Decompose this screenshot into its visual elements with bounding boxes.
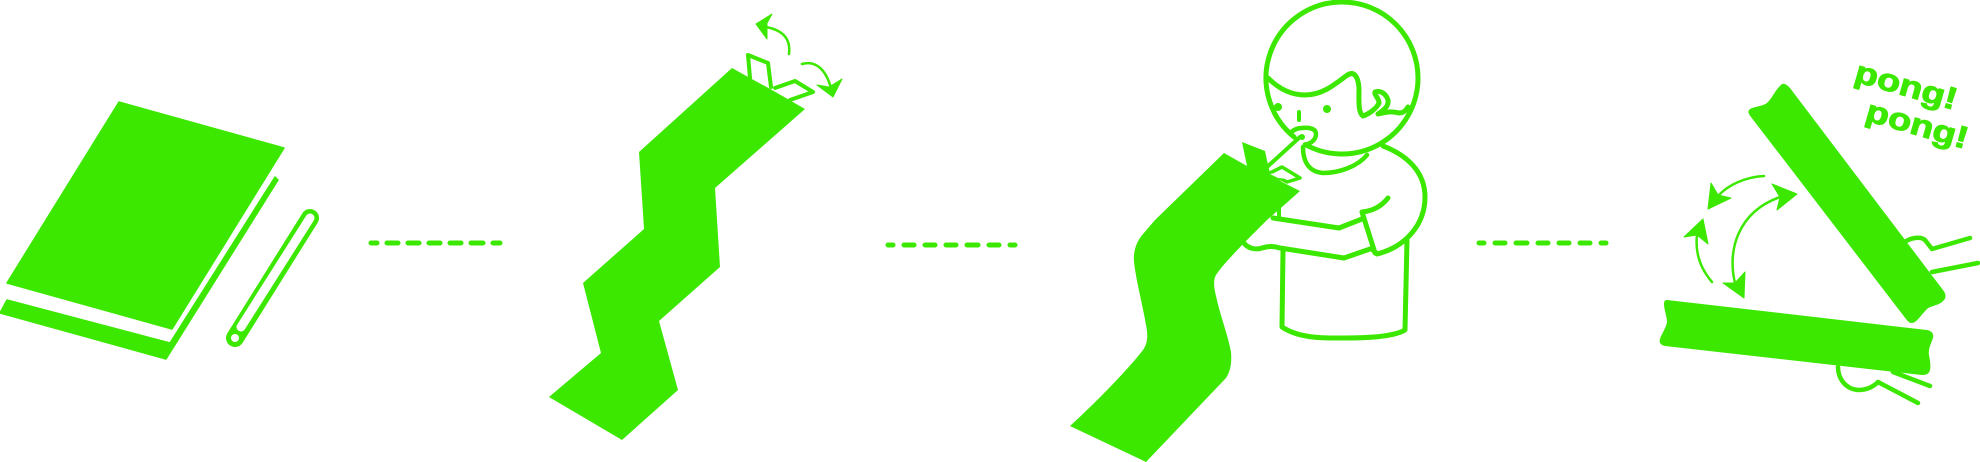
forearm top <box>1273 218 1362 228</box>
paper sheet <box>7 102 284 329</box>
panel: child blowing <box>1070 2 1425 462</box>
zigzag strip <box>549 68 805 440</box>
shoulder <box>1373 146 1425 254</box>
hand flap <box>1270 167 1300 182</box>
mouth <box>1290 128 1316 145</box>
flap outline right <box>775 81 813 100</box>
wrist <box>1277 204 1281 218</box>
dashed connector 1 <box>371 240 500 246</box>
upper paddle <box>1748 84 1946 323</box>
head <box>1266 2 1418 154</box>
arrow: curved down <box>802 63 842 97</box>
arm crease <box>1362 198 1388 253</box>
arrow: outer bottom <box>1684 219 1712 282</box>
finger lines upper <box>1905 238 1978 272</box>
nose <box>1297 112 1301 120</box>
dashed connector 3 <box>1479 240 1606 246</box>
hair <box>1268 74 1408 116</box>
panel: pong paddles <box>1660 55 1978 403</box>
lower page edge <box>0 177 278 359</box>
flap opening <box>1270 172 1290 179</box>
flap opening <box>776 84 804 97</box>
panel: folded strip <box>549 14 842 440</box>
icon: pen <box>231 218 310 342</box>
dashed connector 2 <box>888 242 1015 248</box>
arrow: outer top <box>1708 176 1764 209</box>
forearm bottom <box>1243 242 1373 258</box>
collar <box>1303 147 1367 173</box>
straw <box>1267 137 1300 167</box>
flap outline top <box>748 55 771 87</box>
lower paddle <box>1660 300 1933 375</box>
finger lines lower <box>1838 367 1930 403</box>
arrow: curved up <box>756 14 789 54</box>
sound text: pong 1: pong! <box>1851 55 1961 117</box>
panel: paper and pen <box>0 102 310 359</box>
curved strip <box>1070 142 1300 462</box>
arrow: inner double-headed arc <box>1723 184 1797 298</box>
sound text: pong 2: pong! <box>1862 94 1972 156</box>
eye right <box>1323 105 1331 113</box>
torso <box>1282 240 1407 338</box>
eye left <box>1274 103 1282 111</box>
